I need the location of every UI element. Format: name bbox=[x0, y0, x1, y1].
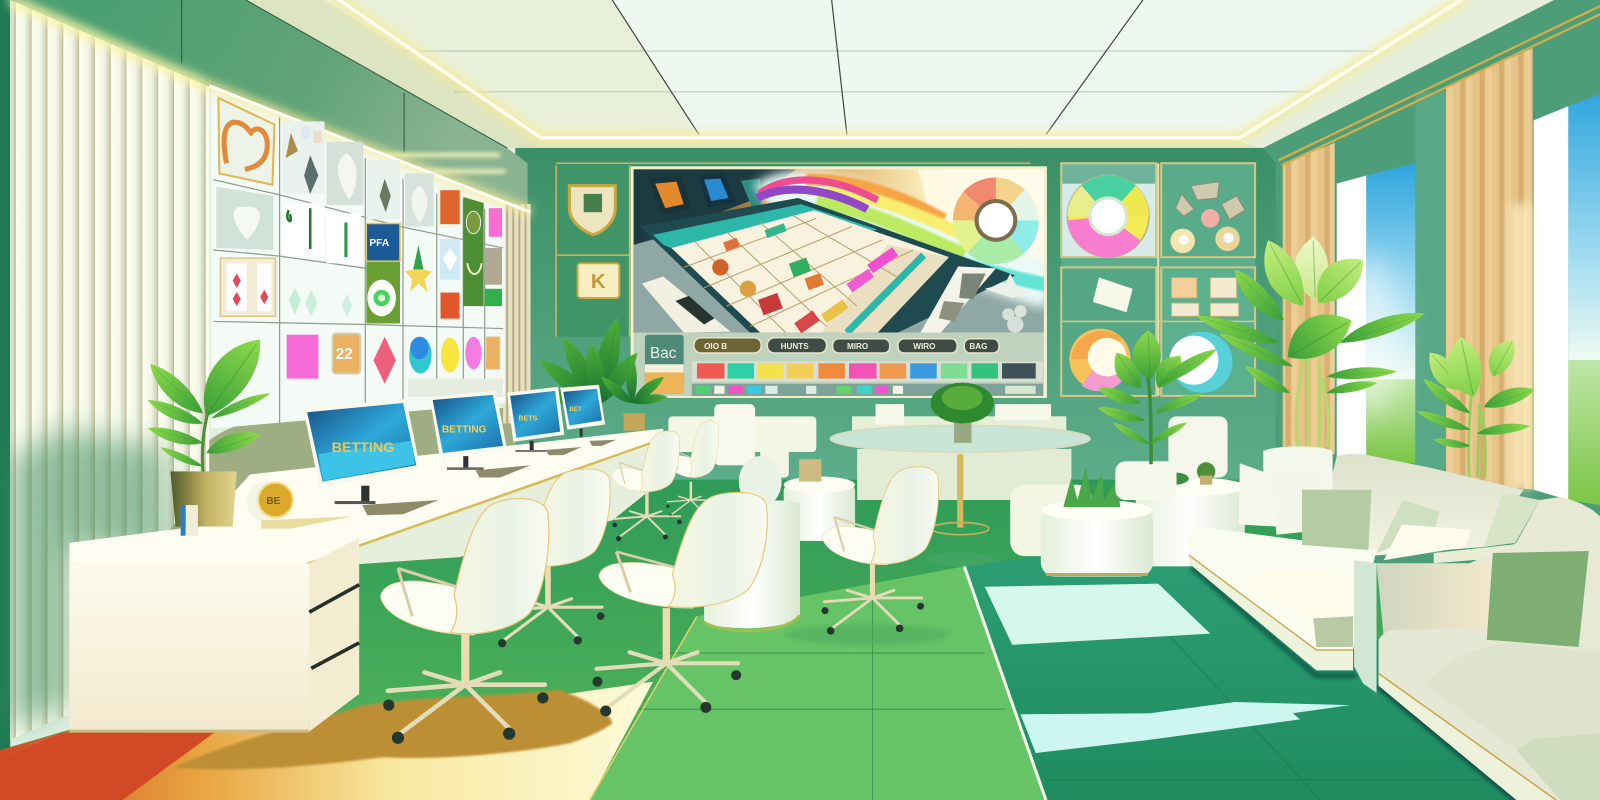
display control bar: HUNTS bbox=[781, 342, 809, 351]
chair middle desk bbox=[476, 469, 610, 647]
grey heart tile bbox=[216, 187, 273, 250]
sunlit floor patch bbox=[0, 682, 653, 800]
curtain one bbox=[1283, 143, 1335, 454]
striped column bbox=[10, 0, 209, 740]
potted bush bbox=[931, 383, 994, 443]
floor shadow bbox=[1379, 686, 1516, 800]
monitor second bbox=[430, 391, 507, 470]
wall pier bbox=[1415, 92, 1447, 500]
icon: stone segments bbox=[1176, 182, 1245, 219]
grass bbox=[1063, 467, 1120, 507]
gold curtain rail bbox=[1279, 6, 1600, 165]
base bbox=[1379, 671, 1600, 800]
back bbox=[1469, 497, 1600, 653]
ceiling bbox=[246, 0, 1554, 148]
pill buttons bbox=[694, 338, 999, 353]
ceiling panels bbox=[324, 0, 1469, 138]
center cylinder table bbox=[784, 459, 855, 541]
window two bbox=[1534, 94, 1600, 505]
light shafts bbox=[985, 584, 1210, 645]
monitor third: BETS bbox=[518, 414, 538, 422]
round table at back bbox=[831, 383, 1090, 566]
desk bbox=[69, 429, 663, 733]
chair far right desk bbox=[666, 421, 719, 518]
grey heart tile upper bbox=[327, 142, 363, 205]
monitor row bbox=[303, 385, 616, 515]
cushions bbox=[1239, 463, 1277, 527]
white handheld left bbox=[642, 277, 731, 333]
small icons row bbox=[692, 384, 1043, 396]
arm bbox=[1377, 563, 1493, 637]
sofa one bbox=[1187, 446, 1540, 676]
tablet card grid bbox=[671, 210, 949, 333]
desk front bbox=[69, 563, 309, 732]
lower wall behind desk bbox=[163, 408, 515, 531]
headrest bbox=[739, 456, 782, 507]
floor shadow bbox=[1192, 567, 1357, 676]
white low sofa back bbox=[1010, 485, 1092, 556]
green column tile bbox=[463, 197, 484, 306]
wall of game tiles: 22 bbox=[336, 346, 353, 363]
wall of game tiles bbox=[209, 86, 531, 429]
tablet frame bbox=[640, 198, 1015, 333]
trophy coin and items: BE bbox=[266, 496, 281, 507]
red tile bbox=[440, 292, 460, 319]
icon: white box bbox=[1093, 278, 1133, 312]
playing card bbox=[220, 258, 276, 316]
seat bbox=[1187, 528, 1377, 650]
colour wheel on display bbox=[953, 178, 1039, 264]
plant behind monitors bbox=[534, 316, 668, 431]
wall display bbox=[631, 166, 1051, 398]
stripe top glow bbox=[10, 0, 209, 87]
display control bar: BAG bbox=[969, 342, 988, 351]
grey lower background bbox=[634, 214, 1044, 333]
curtain two bbox=[1446, 48, 1533, 490]
striped wall end bbox=[503, 204, 531, 423]
card tile bbox=[282, 121, 324, 194]
colour wheel bbox=[1067, 175, 1149, 257]
colour buttons row bbox=[692, 361, 1043, 382]
chair near desk end bbox=[612, 431, 682, 541]
background lounge furniture bbox=[668, 404, 1228, 500]
star tile bbox=[405, 253, 432, 292]
wall of game tiles: PFA bbox=[369, 238, 390, 249]
ceiling light strip bbox=[332, 0, 1469, 138]
display control bar: WIRO bbox=[913, 342, 935, 351]
back bbox=[1329, 454, 1523, 556]
right plant bbox=[1415, 334, 1537, 478]
icon: gold emblem bbox=[569, 186, 615, 235]
green cushion bbox=[1487, 551, 1589, 647]
heart tile bbox=[218, 98, 274, 185]
plate right bbox=[1169, 332, 1233, 393]
monitor first: BETTING bbox=[332, 440, 394, 456]
display control bar: MIRO bbox=[847, 342, 868, 351]
green poster bbox=[366, 223, 400, 323]
icon: pink knob bbox=[1201, 209, 1219, 228]
floor: light green path bbox=[590, 566, 1046, 800]
desktop bbox=[69, 429, 663, 563]
icon: K tile bbox=[578, 263, 619, 298]
light strip on wall bbox=[209, 86, 531, 212]
card pairs bbox=[284, 203, 324, 256]
middle plant bbox=[1095, 330, 1220, 500]
floor: teal zone bbox=[964, 531, 1600, 800]
display control bar bbox=[634, 333, 1044, 396]
grey tile bbox=[405, 173, 434, 227]
chair front bbox=[381, 499, 549, 744]
rainbow swoosh bbox=[757, 180, 1051, 286]
white pot behind sofa bbox=[1263, 446, 1333, 500]
keyboards bbox=[362, 440, 616, 515]
cylinder planter bbox=[1041, 467, 1153, 577]
stems bbox=[1296, 357, 1329, 447]
tall card tile bbox=[366, 160, 400, 219]
monitor second: BETTING bbox=[442, 425, 487, 436]
bright row bbox=[287, 335, 318, 379]
gold pot bbox=[170, 471, 237, 527]
chair center with cylinder seat bbox=[592, 456, 800, 717]
side table and small plants bbox=[1136, 462, 1246, 566]
orange tile bbox=[440, 190, 460, 224]
chair shadow on floor bbox=[173, 690, 612, 769]
panel: gold framed left icons: K bbox=[591, 271, 606, 293]
floor bbox=[0, 480, 1600, 800]
tiles at top of display bbox=[649, 176, 692, 214]
plant on desk bbox=[142, 327, 273, 527]
large plant bbox=[1194, 234, 1427, 447]
plate left bbox=[1069, 329, 1131, 391]
small gold pot bbox=[623, 413, 645, 431]
sofa two bbox=[1354, 497, 1600, 800]
chairs bbox=[381, 421, 939, 744]
pale diamonds bbox=[289, 288, 301, 314]
floor shadow patches bbox=[786, 624, 949, 645]
chair right of center bbox=[822, 467, 939, 635]
white handheld right bbox=[920, 266, 996, 333]
small cards bbox=[1171, 278, 1239, 316]
seat bbox=[1379, 629, 1600, 800]
diamond tile bbox=[440, 239, 460, 280]
display control bar: OIO B bbox=[704, 342, 727, 351]
base bbox=[1189, 555, 1353, 670]
monitor first bbox=[303, 399, 420, 504]
window one bbox=[1337, 163, 1415, 463]
left wall bbox=[0, 0, 528, 750]
sunlight glare bbox=[1346, 255, 1399, 418]
monitor far: BET bbox=[569, 406, 582, 413]
monitor third bbox=[507, 387, 564, 452]
right wall bbox=[1263, 0, 1600, 800]
monitor far bbox=[560, 385, 605, 437]
label: Bac bbox=[650, 345, 677, 362]
desk drawers bbox=[309, 538, 359, 732]
panel: gold framed wall art bbox=[1061, 163, 1255, 396]
under desk bbox=[357, 439, 663, 564]
tile grid lines bbox=[213, 117, 503, 423]
icon: cream knobs bbox=[1170, 227, 1240, 253]
back wall bbox=[515, 148, 1281, 495]
panel: gold framed left icons bbox=[556, 163, 1031, 337]
trophy coin and items bbox=[181, 482, 352, 536]
